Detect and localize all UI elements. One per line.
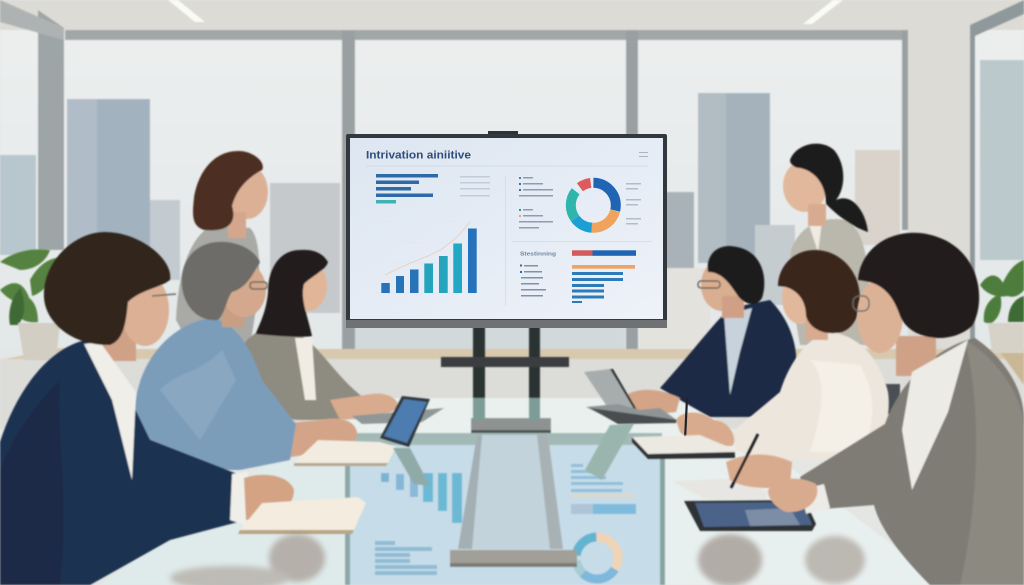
plant: left xyxy=(0,249,60,360)
blazer xyxy=(243,326,372,420)
faint notes top-left xyxy=(460,176,652,306)
ceiling light left xyxy=(168,0,205,22)
lower-right heading: Stestinning xyxy=(520,252,556,258)
display stand xyxy=(441,326,569,420)
jacket xyxy=(0,340,240,585)
shirt xyxy=(724,308,752,395)
window mullions xyxy=(342,30,909,352)
display screen xyxy=(346,131,667,328)
lower wall xyxy=(0,359,1024,429)
notebook: right xyxy=(632,435,736,459)
face xyxy=(222,263,266,317)
notebook pages near tablet xyxy=(672,478,768,500)
neck xyxy=(896,336,936,376)
glasses xyxy=(250,282,267,289)
windows sky xyxy=(0,30,1024,355)
buildings skyline xyxy=(0,60,1024,350)
face xyxy=(857,279,903,353)
window frame top xyxy=(65,30,907,40)
ceiling light right xyxy=(803,0,843,24)
ceiling xyxy=(0,0,1024,32)
reflected list bars right xyxy=(571,464,636,514)
donut legend xyxy=(519,177,553,228)
hair xyxy=(193,151,263,230)
arm and hand xyxy=(330,394,398,420)
reflected list bars left xyxy=(375,541,437,575)
laptop: right xyxy=(584,369,678,480)
person: standing woman right xyxy=(783,144,870,345)
hand xyxy=(244,475,294,520)
plant: right xyxy=(980,260,1024,353)
screen surface xyxy=(350,138,663,319)
person: standing woman left xyxy=(176,151,268,345)
person: grey-haired man xyxy=(135,242,357,470)
neck xyxy=(100,325,136,361)
pen: centre-right xyxy=(685,398,687,440)
person: man front-right in grey blazer xyxy=(726,233,1024,585)
left window column xyxy=(38,10,64,250)
jacket xyxy=(660,300,797,417)
hair xyxy=(708,246,764,304)
console front block xyxy=(450,550,577,567)
shirt xyxy=(135,318,296,470)
blouse xyxy=(732,332,889,460)
reflected bar chart xyxy=(381,473,462,523)
screen title: Intrivation ainiitive xyxy=(366,150,471,162)
display reflection on table xyxy=(350,445,660,585)
head xyxy=(289,261,327,311)
jacket xyxy=(800,338,1024,585)
person: curly-haired woman xyxy=(676,250,889,460)
glasses xyxy=(853,296,869,311)
lower-right list xyxy=(520,264,546,296)
face xyxy=(782,272,818,324)
centre console strip xyxy=(458,435,563,549)
chair right xyxy=(884,384,900,414)
face xyxy=(701,259,743,311)
hair xyxy=(182,242,260,320)
skin xyxy=(783,160,827,212)
skin xyxy=(226,165,268,219)
table reflections of people xyxy=(170,534,865,585)
background: room and windows xyxy=(0,0,1024,429)
notebook: front-left xyxy=(238,497,366,534)
hand with pen xyxy=(726,454,792,488)
screen bezel xyxy=(488,131,518,136)
hair xyxy=(858,233,979,338)
hair xyxy=(778,250,860,333)
cuff xyxy=(800,484,830,514)
hair xyxy=(256,250,328,337)
hair with ponytail xyxy=(790,144,868,232)
table: glass surface xyxy=(100,398,945,585)
person: man seated right in navy suit xyxy=(628,246,797,417)
person: seated woman left xyxy=(243,250,398,420)
hair xyxy=(44,232,170,345)
glasses xyxy=(152,294,176,296)
tablet: right xyxy=(684,500,816,531)
donut annotations xyxy=(626,183,641,224)
reflected donut chart xyxy=(576,537,618,579)
notebook: centre-left xyxy=(294,440,396,466)
glasses xyxy=(698,281,720,288)
laptop: left xyxy=(352,408,444,424)
person: man front-left in navy suit xyxy=(0,232,294,585)
face xyxy=(121,274,169,346)
hand xyxy=(628,390,680,416)
shirt collar xyxy=(84,342,136,480)
tablet xyxy=(380,396,430,486)
lower-right bars xyxy=(572,250,636,303)
neck xyxy=(222,305,244,327)
forearm and hand xyxy=(280,418,357,458)
bar chart xyxy=(373,222,485,293)
shirt xyxy=(902,340,968,490)
shirt cuff xyxy=(230,472,248,526)
horizontal bars top-left xyxy=(376,174,438,204)
right wall column xyxy=(908,22,970,352)
hands xyxy=(676,412,734,446)
donut chart xyxy=(571,183,616,228)
console top block xyxy=(471,418,551,433)
ledge xyxy=(130,349,1024,359)
